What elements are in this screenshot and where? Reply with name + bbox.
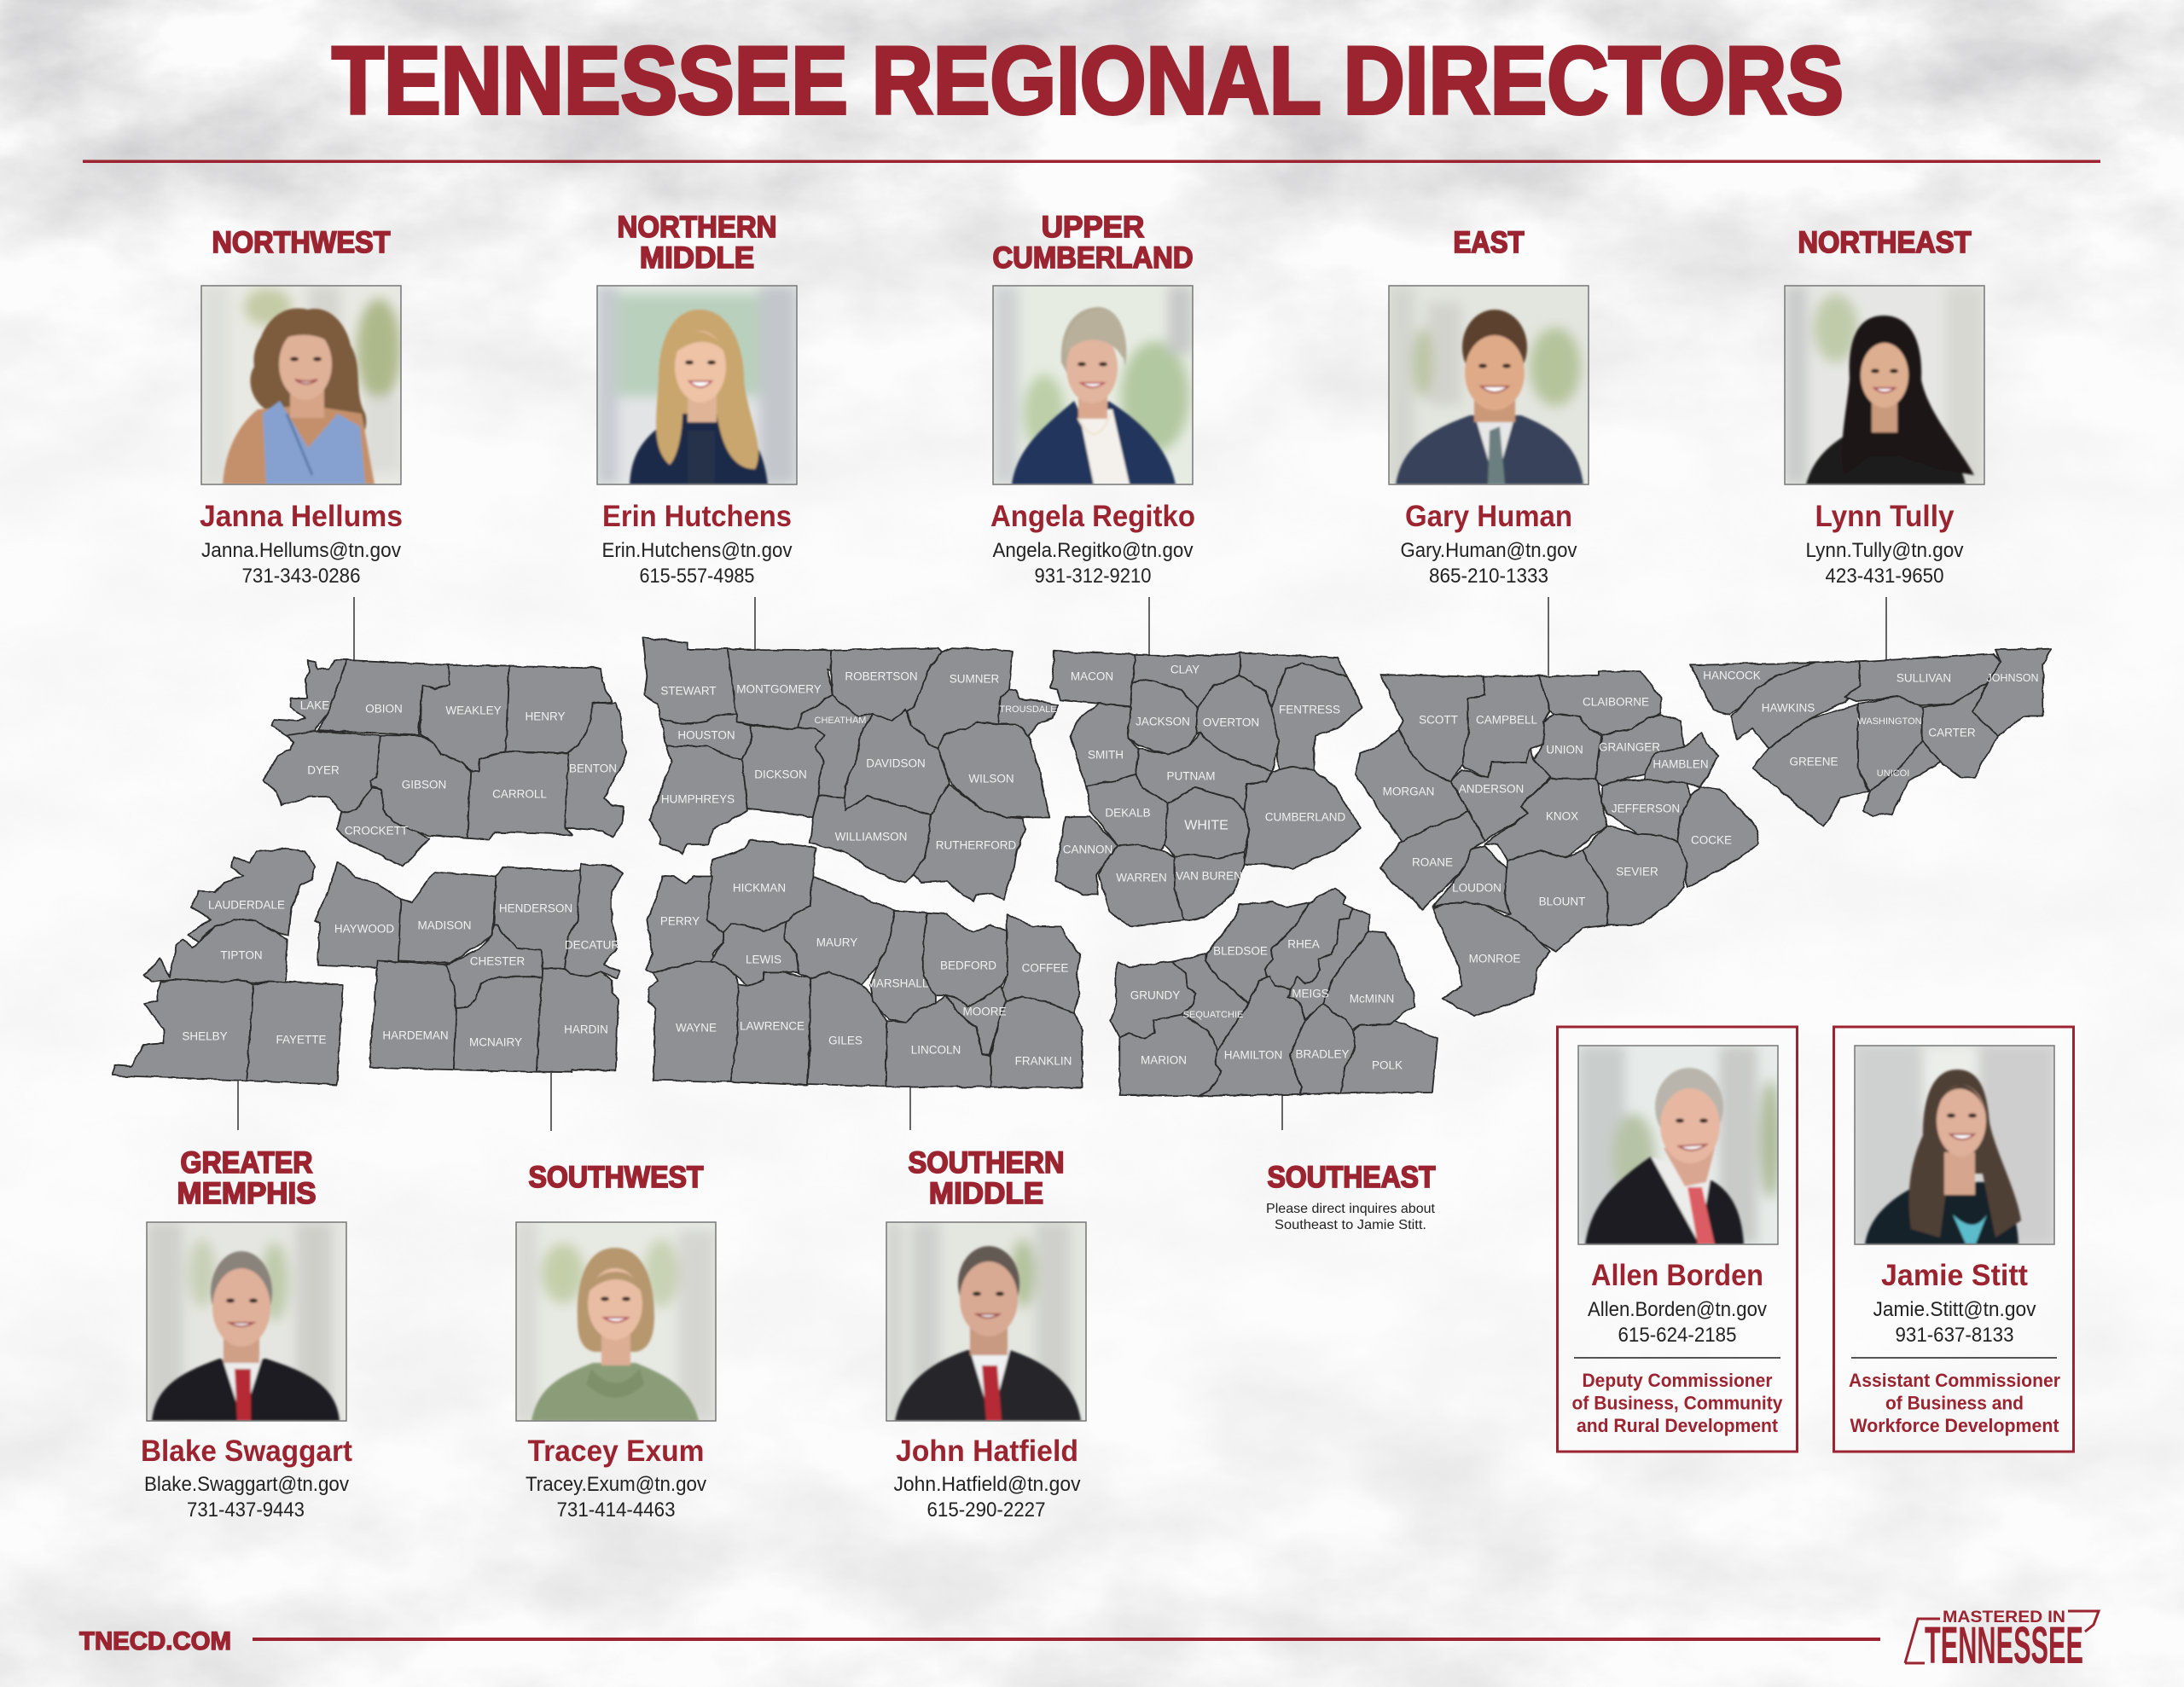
panel: east director bbox=[1389, 226, 1589, 588]
county name labels: RUTHERFORD bbox=[936, 839, 1016, 851]
county name labels: LOUDON bbox=[1452, 882, 1502, 894]
county name labels: VAN BUREN bbox=[1176, 870, 1242, 882]
county name labels: OBION bbox=[365, 703, 403, 715]
county name labels: WILLIAMSON bbox=[835, 831, 907, 843]
county name labels: PERRY bbox=[660, 914, 700, 928]
county name labels: WARREN bbox=[1116, 872, 1167, 884]
heading: southeast: SOUTHEAST bbox=[1268, 1161, 1435, 1194]
county name labels: WHITE bbox=[1184, 819, 1228, 832]
county name labels: HAMBLEN bbox=[1653, 757, 1709, 771]
email: Angela.Regitko@tn.gov bbox=[993, 539, 1193, 562]
county name labels: GIBSON bbox=[402, 778, 446, 791]
name: Blake Swaggart bbox=[141, 1435, 352, 1468]
county name labels: CROCKETT bbox=[345, 824, 408, 838]
county name labels: DAVIDSON bbox=[866, 757, 926, 769]
county shapes: southeast bbox=[1111, 888, 1438, 1096]
email: Tracey.Exum@tn.gov bbox=[526, 1473, 706, 1496]
county name labels: MAURY bbox=[816, 936, 857, 948]
job title: of Business and bbox=[1885, 1392, 2024, 1414]
county name labels: BLEDSOE bbox=[1213, 945, 1268, 957]
county name labels: JEFFERSON bbox=[1612, 802, 1680, 815]
county name labels: TROUSDALE bbox=[999, 704, 1057, 715]
county name labels: JOHNSON bbox=[1986, 672, 2039, 684]
county name labels: KNOX bbox=[1546, 810, 1578, 822]
county name labels: ROBERTSON bbox=[845, 670, 918, 682]
county name labels: MCNAIRY bbox=[469, 1035, 522, 1049]
county name labels: OVERTON bbox=[1203, 716, 1259, 728]
county name labels: SHELBY bbox=[182, 1030, 228, 1042]
county name labels: WAYNE bbox=[676, 1022, 717, 1034]
county name labels: CLAIBORNE bbox=[1583, 696, 1649, 708]
email: Gary.Human@tn.gov bbox=[1401, 539, 1577, 562]
email: Erin.Hutchens@tn.gov bbox=[602, 539, 792, 562]
panel: Jamie Stitt, assistant commissioner bbox=[1834, 1027, 2073, 1452]
photo: Janna Hellums bbox=[201, 286, 401, 484]
county name labels: GRUNDY bbox=[1130, 989, 1180, 1001]
phone: 731-437-9443 bbox=[187, 1499, 305, 1522]
name: John Hatfield bbox=[896, 1435, 1078, 1468]
panel: northern middle director bbox=[597, 211, 797, 588]
county name labels: MORGAN bbox=[1383, 785, 1434, 798]
panel: northwest director bbox=[200, 226, 403, 588]
county name labels: STEWART bbox=[660, 684, 717, 698]
panel: southeast note bbox=[1266, 1161, 1436, 1232]
county name labels: DEKALB bbox=[1105, 807, 1151, 819]
logo: Mastered in Tennessee bbox=[1905, 1609, 2099, 1674]
county name labels: SCOTT bbox=[1419, 713, 1458, 727]
county name labels: HAWKINS bbox=[1762, 701, 1815, 715]
county name labels: BRADLEY bbox=[1295, 1047, 1350, 1061]
email: Blake.Swaggart@tn.gov bbox=[144, 1473, 349, 1496]
photo: Lynn Tully bbox=[1785, 286, 1984, 484]
photo: Angela Regitko bbox=[993, 286, 1193, 484]
county shapes: upper cumberland, east, northeast bbox=[1050, 649, 2052, 1017]
panel: upper cumberland director bbox=[990, 211, 1195, 588]
county name labels: JACKSON bbox=[1136, 715, 1190, 728]
name: Angela Regitko bbox=[990, 500, 1195, 533]
email: Lynn.Tully@tn.gov bbox=[1805, 539, 1964, 562]
job title: Workforce Development bbox=[1850, 1415, 2059, 1436]
heading: east: EAST bbox=[1454, 226, 1524, 259]
county name labels: CAMPBELL bbox=[1476, 713, 1538, 727]
email: Jamie.Stitt@tn.gov bbox=[1873, 1298, 2036, 1321]
name: Janna Hellums bbox=[200, 500, 403, 533]
county name labels: UNICOI bbox=[1877, 768, 1909, 779]
phone: 615-624-2185 bbox=[1618, 1324, 1737, 1347]
heading: northern middle: NORTHERN bbox=[618, 211, 776, 244]
county name labels bbox=[182, 664, 2039, 1071]
county name labels: MEIGS bbox=[1292, 988, 1329, 1000]
job title: of Business, Community bbox=[1571, 1392, 1783, 1414]
job title: Assistant Commissioner bbox=[1849, 1370, 2060, 1391]
name: Jamie Stitt bbox=[1881, 1259, 2028, 1292]
county name labels: HOUSTON bbox=[677, 728, 735, 742]
county name labels: SUMNER bbox=[950, 672, 999, 686]
county name labels: UNION bbox=[1546, 744, 1583, 756]
heading: northwest: NORTHWEST bbox=[212, 226, 391, 259]
photo: John Hatfield bbox=[886, 1222, 1086, 1421]
county shapes: greater memphis bbox=[112, 849, 343, 1085]
photo: Allen Borden bbox=[1578, 1046, 1780, 1244]
county name labels: CUMBERLAND bbox=[1265, 810, 1346, 824]
name: Allen Borden bbox=[1591, 1259, 1763, 1292]
website: TNECD.COM bbox=[79, 1627, 231, 1655]
county name labels: ANDERSON bbox=[1459, 783, 1524, 795]
email: Janna.Hellums@tn.gov bbox=[201, 539, 401, 562]
county name labels: DECATUR bbox=[565, 938, 619, 952]
county name labels: ROANE bbox=[1412, 856, 1453, 868]
county name labels: BENTON bbox=[569, 762, 617, 774]
southeast referral note: Southeast to Jamie Stitt. bbox=[1275, 1218, 1426, 1232]
southeast referral note: Please direct inquires about bbox=[1266, 1202, 1436, 1216]
county name labels: CHESTER bbox=[470, 955, 526, 967]
county name labels: HUMPHREYS bbox=[661, 793, 735, 805]
heading: northern middle: MIDDLE bbox=[640, 241, 754, 275]
county name labels: CARTER bbox=[1928, 727, 1976, 739]
county name labels: WEAKLEY bbox=[445, 704, 502, 716]
county name labels: CHEATHAM bbox=[815, 716, 866, 726]
county name labels: CARROLL bbox=[492, 788, 547, 800]
email: Allen.Borden@tn.gov bbox=[1588, 1298, 1767, 1321]
title: TENNESSEE REGIONAL DIRECTORS bbox=[332, 27, 1844, 134]
heading: southwest: SOUTHWEST bbox=[529, 1161, 703, 1194]
county name labels: COFFEE bbox=[1022, 962, 1068, 974]
county name labels: SMITH bbox=[1088, 749, 1124, 761]
county name labels: POLK bbox=[1372, 1059, 1403, 1071]
panel: northeast director bbox=[1785, 226, 1984, 588]
county name labels: LAWRENCE bbox=[740, 1020, 804, 1032]
phone: 931-312-9210 bbox=[1034, 565, 1152, 588]
county name labels: LEWIS bbox=[746, 954, 781, 965]
heading: southern middle: SOUTHERN bbox=[908, 1146, 1065, 1180]
county name labels: LAUDERDALE bbox=[208, 899, 285, 911]
phone: 615-290-2227 bbox=[926, 1499, 1046, 1522]
county name labels: McMINN bbox=[1350, 993, 1394, 1005]
county name labels: SULLIVAN bbox=[1896, 672, 1951, 684]
county name labels: TIPTON bbox=[220, 948, 263, 962]
county name labels: FRANKLIN bbox=[1015, 1054, 1072, 1068]
county name labels: HAMILTON bbox=[1224, 1049, 1282, 1061]
phone: 731-414-4463 bbox=[556, 1499, 676, 1522]
county name labels: CANNON bbox=[1063, 843, 1112, 856]
map of Tennessee counties by region bbox=[112, 638, 2052, 1096]
panel: Allen Borden, deputy commissioner bbox=[1558, 1027, 1797, 1452]
logo: Mastered in Tennessee: MASTERED IN bbox=[1943, 1609, 2065, 1626]
heading: northeast: NORTHEAST bbox=[1798, 226, 1971, 259]
county shapes, all regions bbox=[112, 638, 2052, 1096]
heading: upper cumberland: CUMBERLAND bbox=[993, 241, 1193, 275]
name: Erin Hutchens bbox=[602, 500, 792, 533]
phone: 615-557-4985 bbox=[640, 565, 754, 588]
photo: Erin Hutchens bbox=[597, 286, 797, 484]
county name labels: BEDFORD bbox=[940, 959, 996, 972]
county name labels: HICKMAN bbox=[733, 882, 786, 894]
photo: Jamie Stitt bbox=[1855, 1046, 2054, 1244]
leader lines from map regions to directors bbox=[238, 597, 1886, 1131]
county name labels: HAYWOOD bbox=[334, 923, 394, 935]
county name labels: SEQUATCHIE bbox=[1183, 1010, 1243, 1020]
photo: Gary Human bbox=[1389, 286, 1589, 484]
county name labels: BLOUNT bbox=[1539, 896, 1585, 907]
county name labels: GRAINGER bbox=[1599, 740, 1660, 754]
photo: Tracey Exum bbox=[516, 1222, 716, 1421]
county name labels: PUTNAM bbox=[1167, 769, 1215, 783]
county name labels: HANCOCK bbox=[1703, 669, 1761, 682]
county name labels: GREENE bbox=[1789, 756, 1838, 768]
county name labels: DICKSON bbox=[754, 768, 807, 781]
county name labels: MARSHALL bbox=[867, 977, 929, 989]
phone: 731-343-0286 bbox=[242, 565, 360, 588]
county name labels: WILSON bbox=[968, 773, 1014, 785]
heading: greater memphis: MEMPHIS bbox=[177, 1177, 316, 1210]
phone: 931-637-8133 bbox=[1896, 1324, 2013, 1347]
county name labels: HENRY bbox=[525, 710, 566, 723]
email: John.Hatfield@tn.gov bbox=[894, 1473, 1080, 1496]
heading: upper cumberland: UPPER bbox=[1042, 211, 1144, 244]
panel: southern middle director bbox=[886, 1146, 1086, 1522]
job title: Deputy Commissioner bbox=[1582, 1370, 1773, 1391]
panel: greater memphis director bbox=[141, 1146, 352, 1522]
name: Tracey Exum bbox=[527, 1435, 705, 1468]
county name labels: WASHINGTON bbox=[1857, 716, 1922, 727]
county name labels: MADISON bbox=[417, 919, 472, 931]
county name labels: MACON bbox=[1071, 670, 1113, 682]
county name labels: HENDERSON bbox=[499, 902, 572, 914]
phone: 865-210-1333 bbox=[1429, 565, 1548, 588]
county name labels: HARDEMAN bbox=[382, 1029, 449, 1042]
county name labels: LINCOLN bbox=[911, 1044, 961, 1056]
county name labels: SEVIER bbox=[1616, 865, 1658, 878]
county name labels: RHEA bbox=[1287, 938, 1320, 950]
county name labels: MONTGOMERY bbox=[736, 682, 822, 696]
county name labels: MOORE bbox=[962, 1005, 1007, 1018]
county name labels: MONROE bbox=[1469, 952, 1520, 965]
job title: and Rural Development bbox=[1577, 1415, 1779, 1436]
county name labels: LAKE bbox=[300, 699, 329, 711]
county name labels: FAYETTE bbox=[276, 1034, 327, 1046]
county name labels: GILES bbox=[828, 1034, 863, 1047]
name: Lynn Tully bbox=[1815, 500, 1955, 533]
heading: greater memphis: GREATER bbox=[181, 1146, 312, 1180]
county name labels: CLAY bbox=[1170, 664, 1199, 675]
phone: 423-431-9650 bbox=[1826, 565, 1943, 588]
county name labels: MARION bbox=[1141, 1054, 1187, 1066]
county name labels: DYER bbox=[307, 764, 340, 776]
name: Gary Human bbox=[1405, 500, 1572, 533]
county name labels: HARDIN bbox=[564, 1023, 608, 1035]
county name labels: COCKE bbox=[1691, 834, 1732, 846]
photo: Blake Swaggart bbox=[147, 1222, 346, 1421]
heading: southern middle: MIDDLE bbox=[929, 1177, 1043, 1210]
county shapes: northwest, northern middle, southwest, southern middle bbox=[264, 638, 1083, 1088]
panel: southwest director bbox=[516, 1161, 716, 1522]
county name labels: FENTRESS bbox=[1279, 703, 1340, 716]
footer bbox=[79, 1609, 2099, 1674]
